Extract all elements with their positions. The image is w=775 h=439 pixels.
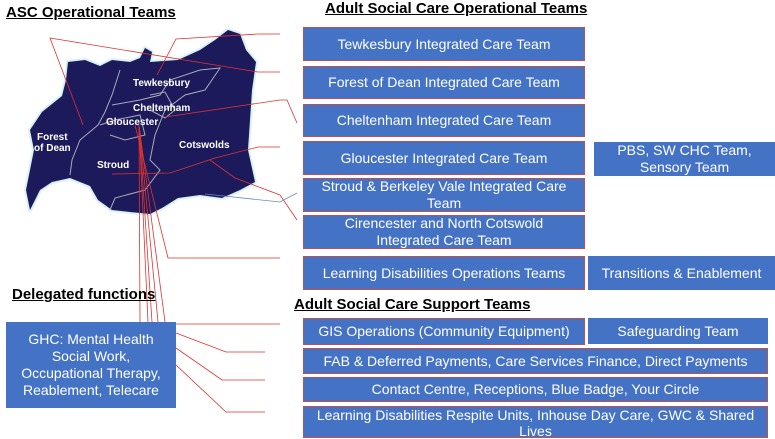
box: GHC: Occupational Therapy, bbox=[21, 365, 161, 381]
box: Cirencester: Cirencester and North Cotswold bbox=[345, 215, 543, 231]
box: Safeguarding bbox=[588, 318, 768, 344]
box: Stroud: Stroud & Berkeley Vale Integrated Care bbox=[322, 178, 566, 194]
box: Stroud bbox=[303, 178, 585, 212]
box: Cheltenham: Cheltenham Integrated Care Team bbox=[337, 112, 551, 128]
connector lines bbox=[50, 34, 297, 412]
map labels: Forest bbox=[37, 132, 68, 143]
map labels: of Dean bbox=[34, 143, 71, 154]
map labels: Tewkesbury bbox=[133, 78, 190, 89]
map labels: Stroud bbox=[97, 160, 129, 171]
box: Gloucester: Gloucester Integrated Care Team bbox=[341, 150, 547, 166]
box: Stroud: Team bbox=[427, 195, 461, 211]
box: GIS: GIS Operations (Community Equipment) bbox=[318, 323, 570, 339]
title: Adult Social Care Support Teams: Adult Social Care Support Teams bbox=[294, 296, 530, 313]
title: Adult Social Care Operational Teams: Adult Social Care Operational Teams bbox=[325, 0, 587, 17]
box: LD Respite: Lives bbox=[519, 423, 552, 439]
box: GHC: GHC: Mental Health bbox=[28, 331, 154, 347]
map labels: Gloucester bbox=[106, 117, 158, 128]
box: Forest of Dean: Forest of Dean Integrated Care Team bbox=[328, 74, 560, 90]
box: GHC bbox=[6, 322, 176, 408]
box: Safeguarding: Safeguarding Team bbox=[617, 322, 739, 338]
box: Contact Centre: Contact Centre, Receptions, Blue Badge, Your Circle bbox=[372, 381, 699, 397]
box: Forest of Dean bbox=[303, 66, 585, 99]
box: Learning Disabilities Ops bbox=[303, 256, 585, 290]
box: Contact Centre bbox=[303, 377, 768, 402]
box: FAB: FAB & Deferred Payments, Care Services Finance, Direct Payments bbox=[323, 352, 748, 368]
map labels: Cheltenham bbox=[133, 103, 190, 114]
box: Cirencester bbox=[303, 215, 585, 249]
box: GHC: Social Work, bbox=[52, 348, 130, 364]
map labels bbox=[34, 78, 230, 171]
box: LD Respite: Learning Disabilities Respite Units, Inhouse Day Care, GWC & Shared bbox=[317, 407, 754, 423]
box: Transitions bbox=[588, 256, 775, 290]
box: GIS bbox=[303, 318, 585, 345]
box: PBS: PBS, SW CHC Team, bbox=[617, 142, 752, 158]
box: GHC: Reablement, Telecare bbox=[23, 382, 159, 398]
box: PBS: Sensory Team bbox=[640, 159, 729, 175]
map labels: Cotswolds bbox=[179, 140, 230, 151]
box: Tewkesbury: Tewkesbury Integrated Care Team bbox=[338, 36, 550, 52]
title: ASC Operational Teams: ASC Operational Teams bbox=[6, 4, 176, 21]
box: Transitions: Transitions & Enablement bbox=[602, 264, 761, 280]
box: Tewkesbury bbox=[303, 27, 585, 61]
box: Learning Disabilities Ops: Learning Disabilities Operations Teams bbox=[323, 264, 565, 280]
box: Cheltenham bbox=[303, 104, 585, 137]
map: Gloucestershire bbox=[26, 30, 256, 214]
title: Delegated functions: Delegated functions bbox=[12, 286, 155, 303]
box: PBS bbox=[594, 142, 775, 176]
box: Cirencester: Integrated Care Team bbox=[376, 232, 512, 248]
box: LD Respite bbox=[303, 406, 768, 438]
box: FAB bbox=[303, 348, 768, 374]
box: Gloucester bbox=[303, 141, 585, 175]
